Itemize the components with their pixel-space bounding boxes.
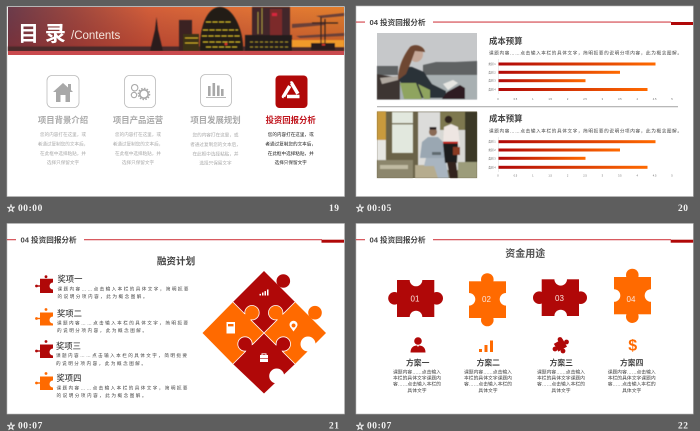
plan two: 本栏的具体文字课题内 bbox=[464, 374, 512, 382]
item: project background bbox=[38, 76, 88, 166]
bar chart: top: 类别 4 bbox=[488, 88, 496, 92]
footer: slide 22 bbox=[356, 422, 689, 431]
item: development plan: 项目发展规划 bbox=[190, 115, 241, 125]
bar chart: bottom: 类别 3 bbox=[488, 156, 496, 160]
plan three: 具体文字 bbox=[551, 387, 571, 394]
puzzle 03: 03 bbox=[555, 294, 564, 303]
plan four: 方案四 bbox=[620, 358, 644, 368]
plan three: 本栏的具体文字课题内 bbox=[537, 374, 585, 382]
item: award two: 的说明分项内容，此为概念图解。 bbox=[57, 327, 147, 334]
item: award four: 课题内容……点击输入本栏的具体文字，简明扼要 bbox=[56, 384, 188, 392]
puzzle 02 bbox=[463, 273, 512, 326]
item: product operation: 您的内容打在这里，或 bbox=[115, 131, 161, 138]
item: project background: 者通过复制您的文本后， bbox=[38, 141, 88, 148]
item: award one: 课题内容……点击输入本栏的具体文字，简明扼要 bbox=[58, 286, 189, 292]
item: award one bbox=[35, 274, 189, 300]
header photo banner bbox=[8, 7, 344, 51]
panel: fund usage slide bbox=[356, 224, 693, 414]
section header: 04 投资回报分析 bbox=[20, 235, 77, 245]
bar chart: bottom: 1 bbox=[532, 174, 534, 178]
plan four: 容……点击输入本栏的 bbox=[608, 380, 656, 388]
bar chart: top: 3.5 bbox=[618, 97, 622, 101]
diagram: puzzle diamond bbox=[202, 271, 326, 394]
item: investment return: 在此框中选择粘贴，并 bbox=[268, 150, 314, 157]
plan three: 课题内容……点击输入 bbox=[537, 368, 585, 376]
bar chart: top: 类别 3 bbox=[488, 79, 496, 83]
item: development plan bbox=[190, 74, 241, 166]
item: product operation: 在此框中选择粘贴，并 bbox=[115, 150, 161, 157]
section header: 04 投资回报分析 bbox=[370, 17, 426, 27]
item: award three: 奖项三 bbox=[56, 341, 81, 351]
icon: rising bars bbox=[479, 340, 493, 352]
item: award two: 课题内容……点击输入本栏的具体文字，简明扼要 bbox=[57, 320, 188, 326]
photo: woman with tablet bbox=[377, 33, 477, 100]
item: award two: 奖项二 bbox=[57, 308, 82, 318]
bar chart: top: 0 bbox=[497, 97, 499, 101]
plan four: 课题内容……点击输入 bbox=[608, 368, 656, 376]
item: award three bbox=[35, 340, 187, 367]
item: award three: 课题内容……点击输入本栏的具体文字，简明扼要 bbox=[56, 352, 187, 359]
bar chart: top: 成本预算 bbox=[489, 36, 522, 46]
bar chart: bottom: 4 bbox=[636, 174, 638, 178]
icon: recycle bbox=[276, 76, 308, 108]
icon: growth chart bbox=[260, 290, 268, 296]
heading: contents bbox=[18, 23, 120, 46]
item: award three: 的说明分项内容，此为概念图解。 bbox=[56, 360, 146, 367]
item: project background: 选择只保留文字 bbox=[47, 159, 79, 166]
bar chart: bottom: 3 bbox=[602, 174, 604, 178]
section header bbox=[356, 17, 693, 27]
plan two: 方案二 bbox=[477, 358, 500, 368]
icon: person bbox=[410, 337, 426, 352]
plan two: 容……点击输入本栏的 bbox=[464, 380, 512, 388]
bar chart: bottom: 0.5 bbox=[514, 174, 518, 178]
heading: contents: /Contents bbox=[71, 30, 120, 42]
heading: financing plan: 融资计划 bbox=[157, 256, 195, 268]
icon: mini puzzle red bbox=[35, 275, 53, 293]
bar chart: bottom bbox=[488, 114, 682, 178]
bar chart: bottom: 类别 1 bbox=[488, 140, 496, 144]
bar chart: bottom: 0 bbox=[497, 174, 499, 178]
icon: mini puzzle orange bbox=[35, 308, 53, 326]
puzzle 04: 04 bbox=[627, 295, 636, 304]
item: product operation: 者通过复制您的文本后， bbox=[113, 141, 163, 148]
bar chart: top: 2.5 bbox=[583, 97, 587, 101]
bar chart: bottom: 5 bbox=[671, 174, 673, 178]
bar chart: top: 2 bbox=[567, 97, 569, 101]
plan one: 课题内容……点击输入 bbox=[393, 368, 441, 376]
icon: dollar: $ bbox=[628, 338, 637, 354]
icon: puzzle piece bbox=[553, 337, 569, 353]
item: project background: 在此框中选择粘贴，并 bbox=[40, 150, 86, 157]
bar chart: top: 类别 1 bbox=[488, 62, 496, 66]
footer: slide 19: 00:00 bbox=[18, 204, 43, 214]
item: project background: 您的内容打在这里，或 bbox=[40, 131, 86, 138]
section header bbox=[7, 235, 344, 245]
plan three: 容……点击输入本栏的 bbox=[537, 380, 585, 388]
footer: slide 19: ☆ bbox=[7, 204, 15, 213]
bar chart: top: 课题内容……点击输入本栏的具体文字，简明扼要的说明分项内容，此为概念图解。 bbox=[489, 50, 682, 57]
plan two: 课题内容……点击输入 bbox=[464, 368, 512, 376]
footer: slide 21: ☆ bbox=[7, 422, 15, 431]
footer: slide 21 bbox=[7, 422, 340, 431]
plan one: 容……点击输入本栏的 bbox=[393, 380, 441, 388]
item: award one: 奖项一 bbox=[58, 274, 82, 284]
item: investment return: 选择只保留文字 bbox=[275, 159, 307, 166]
bar chart: bottom: 类别 4 bbox=[488, 165, 496, 169]
item: project background: 项目背景介绍 bbox=[38, 115, 88, 125]
bar chart: top: 4 bbox=[636, 97, 638, 101]
photo: business people bbox=[377, 112, 477, 178]
plan four: 具体文字 bbox=[622, 387, 641, 394]
bar chart: top: 1 bbox=[532, 97, 534, 101]
plan two bbox=[464, 340, 512, 394]
item: development plan: 您的内容打在这里，或 bbox=[193, 132, 239, 138]
plan four bbox=[608, 338, 656, 394]
bar chart: top: 3 bbox=[602, 97, 604, 101]
plan two: 具体文字 bbox=[478, 387, 498, 394]
footer: slide 19: 19 bbox=[329, 204, 340, 214]
bar chart: bottom: 4.5 bbox=[653, 174, 657, 178]
bar chart: top: 1.5 bbox=[548, 97, 553, 101]
panel: cost budget slide bbox=[356, 6, 693, 196]
section header: 04 投资回报分析 bbox=[370, 235, 426, 245]
heading: fund usage: 资金用途 bbox=[505, 247, 545, 260]
item: award four: 的说明分项内容，此为概念图解。 bbox=[56, 392, 146, 399]
item: award four: 奖项四 bbox=[56, 373, 81, 383]
red band bbox=[8, 51, 344, 55]
footer: slide 20: 20 bbox=[678, 204, 689, 214]
item: award four bbox=[35, 372, 188, 399]
plan one bbox=[393, 337, 441, 394]
plan three bbox=[537, 337, 585, 394]
bar chart: bottom: 课题内容……点击输入本栏的具体文字，简明扼要的说明分项内容，此为概念图解。 bbox=[489, 128, 682, 134]
item: investment return: 您的内容打在这里，或 bbox=[268, 131, 314, 138]
plan one: 方案一 bbox=[406, 358, 430, 368]
icon: house bbox=[47, 76, 79, 108]
section header bbox=[356, 235, 693, 245]
bar chart: bottom: 1.5 bbox=[548, 174, 553, 178]
bar chart: bottom: 3.5 bbox=[618, 174, 622, 178]
bar chart: bottom: 2 bbox=[567, 174, 569, 178]
puzzle 01: 01 bbox=[411, 294, 420, 304]
item: product operation: 项目产品运营 bbox=[113, 115, 163, 125]
bar chart: top: 5 bbox=[671, 97, 673, 101]
item: product operation: 选择只保留文字 bbox=[122, 159, 154, 166]
plan one: 本栏的具体文字课题内 bbox=[393, 374, 441, 382]
puzzle 04 bbox=[608, 269, 657, 323]
icon: mini puzzle red bbox=[35, 340, 53, 358]
panel: contents slide bbox=[7, 6, 344, 196]
bar chart: top bbox=[488, 36, 682, 101]
item: development plan: 者通过复制您的文本后， bbox=[190, 141, 241, 148]
item: award two bbox=[35, 308, 188, 334]
heading: contents: 目 录 bbox=[18, 23, 66, 46]
plan one: 具体文字 bbox=[407, 387, 427, 394]
plan four: 本栏的具体文字课题内 bbox=[608, 374, 656, 382]
bar chart: bottom: 类别 2 bbox=[488, 148, 496, 152]
icon: target pin bbox=[290, 321, 298, 332]
icon: mini puzzle orange bbox=[35, 372, 53, 390]
footer: slide 20: ☆ bbox=[356, 204, 364, 213]
item: development plan: 选择只保留文字 bbox=[199, 160, 232, 166]
footer: slide 20: 00:05 bbox=[367, 204, 392, 214]
item: development plan: 在此框中选择粘贴，并 bbox=[193, 150, 239, 158]
item: investment return: 者通过复制您的文本后， bbox=[265, 141, 316, 148]
puzzle 03 bbox=[533, 273, 587, 322]
footer: slide 19 bbox=[7, 204, 340, 214]
icon: gears bbox=[124, 76, 156, 108]
puzzle 02: 02 bbox=[482, 295, 491, 304]
footer: slide 22: ☆ bbox=[356, 422, 364, 431]
item: product operation bbox=[113, 76, 163, 166]
bar chart: bottom: 2.5 bbox=[583, 174, 587, 178]
puzzle 01 bbox=[388, 274, 443, 323]
item: investment return: 投资回报分析 bbox=[266, 115, 316, 125]
bar chart: top: 类别 2 bbox=[488, 70, 496, 74]
icon: briefcase bbox=[260, 353, 268, 362]
plan three: 方案三 bbox=[550, 358, 573, 368]
icon: bar chart bbox=[200, 74, 232, 106]
bar chart: top: 4.5 bbox=[653, 97, 657, 101]
bar chart: top: 0.5 bbox=[514, 97, 518, 101]
bar chart: bottom: 成本预算 bbox=[489, 114, 522, 124]
icon: calculator bbox=[226, 322, 235, 334]
panel: financing plan slide bbox=[7, 224, 344, 414]
item: investment return bbox=[265, 76, 316, 166]
footer: slide 20 bbox=[356, 204, 689, 214]
item: award one: 的说明分项内容，此为概念图解。 bbox=[58, 293, 148, 300]
